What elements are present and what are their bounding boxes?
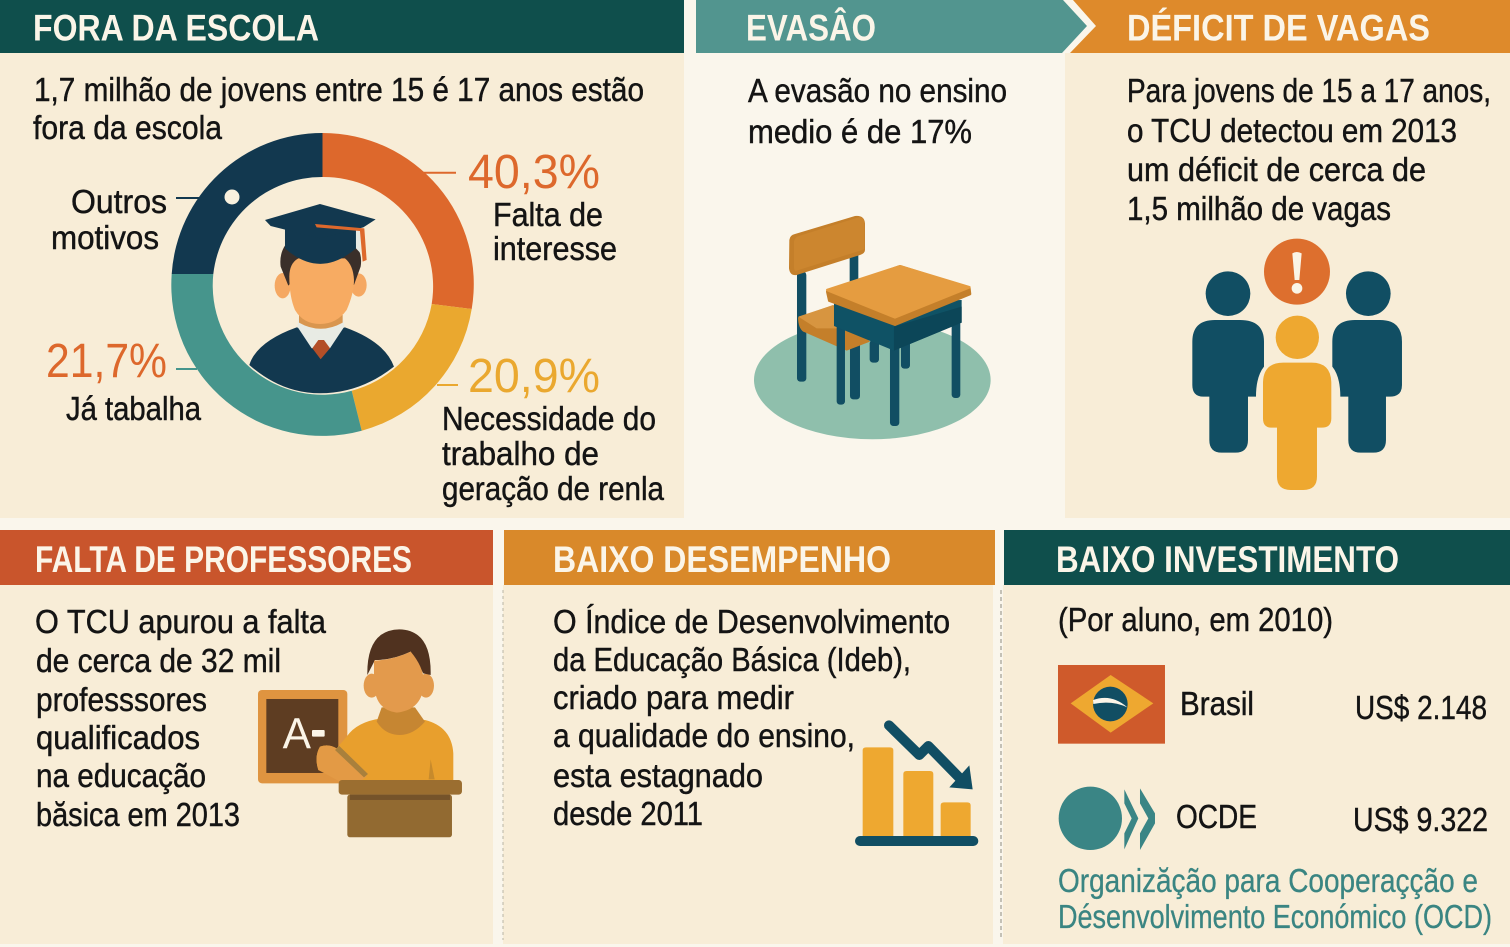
label: outros motivos: motivos — [51, 219, 159, 256]
row: ocde: OCDE — [1176, 798, 1257, 835]
heading: evasao arrow: EVASÂO — [746, 6, 876, 48]
row: brasil — [1058, 665, 1487, 744]
text: ideb: esta estagnado — [553, 757, 763, 794]
text: ocde definition — [1058, 862, 1492, 935]
label: 40,3% falta de interesse: Falta de — [493, 196, 603, 233]
text: ideb: O Índice de Desenvolvimento — [553, 603, 950, 640]
intro text — [33, 71, 644, 146]
icon: declining bar chart — [855, 725, 978, 846]
panel: evasao — [696, 0, 1087, 518]
icon: teacher at blackboard — [258, 629, 462, 837]
label: 21,7% ja tabalha: 21,7% — [46, 335, 167, 388]
icon: people with alert — [1192, 239, 1402, 490]
label: outros motivos — [51, 183, 200, 256]
heading: baixo desempenho: BAIXO DESEMPENHO — [553, 539, 891, 580]
label: 21,7% ja tabalha: Já tabalha — [66, 390, 202, 427]
text: falta de professores: O TCU apurou a falta — [35, 603, 327, 640]
heading: falta de professores: FALTA DE PROFESSORES — [35, 539, 412, 580]
panel: baixo desempenho — [503, 530, 995, 944]
icon: teacher at blackboard: A — [283, 711, 311, 759]
intro text: fora da escola — [33, 109, 223, 146]
text: evasao: A evasão no ensino — [748, 72, 1007, 109]
text: falta de professores — [35, 603, 327, 833]
label: 20,9% necessidade do trabalho: Necessidade do — [442, 400, 656, 437]
text: evasao — [748, 72, 1007, 150]
row: ocde: US$ 9.322 — [1353, 801, 1488, 838]
heading: deficit de vagas: DÉFICIT DE VAGAS — [1127, 8, 1430, 48]
text: deficit — [1127, 72, 1491, 227]
heading: fora da escola — [0, 0, 684, 53]
text: ideb: criado para medir — [553, 679, 794, 716]
text: ideb — [553, 603, 950, 832]
text: ideb: da Educação Básica (Ideb), — [553, 641, 911, 678]
text: evasao: medio é de 17% — [748, 113, 972, 150]
label: 20,9% necessidade do trabalho: 20,9% — [468, 350, 600, 403]
text: ideb: a qualidade do ensino, — [553, 717, 855, 754]
icon: school desk and chair — [754, 216, 991, 439]
text: deficit: 1,5 milhão de vagas — [1127, 190, 1391, 227]
text: falta de professores: de cerca de 32 mil — [36, 642, 281, 679]
text: ideb: desde 2011 — [553, 795, 703, 832]
heading: baixo investimento — [1004, 530, 1510, 585]
heading: baixo desempenho — [504, 530, 995, 585]
icon: ocde logo — [1059, 787, 1155, 850]
panel: falta de professores — [0, 530, 493, 944]
heading: baixo investimento: BAIXO INVESTIMENTO — [1056, 539, 1399, 580]
icon: brazil flag — [1058, 665, 1165, 744]
label: 40,3% falta de interesse: 40,3% — [468, 146, 600, 199]
text: falta de professores: na educação — [36, 757, 206, 794]
heading: deficit de vagas — [1070, 0, 1510, 53]
icon: graduate — [249, 204, 394, 393]
panel: fora da escola — [0, 0, 684, 518]
text: deficit: o TCU detectou em 2013 — [1127, 112, 1457, 149]
text: falta de professores: qualificados — [36, 719, 200, 756]
label: 20,9% necessidade do trabalho: trabalho de — [442, 435, 599, 472]
label: 20,9% necessidade do trabalho — [437, 350, 665, 507]
heading: falta de professores — [0, 530, 493, 585]
text: deficit: um déficit de cerca de — [1127, 151, 1426, 188]
label: 40,3% falta de interesse: interesse — [493, 230, 617, 267]
text: falta de professores: professsores — [36, 681, 207, 718]
row: brasil: US$ 2.148 — [1355, 689, 1487, 726]
heading: evasao arrow — [696, 0, 1087, 53]
heading: fora da escola: FORA DA ESCOLA — [33, 8, 319, 48]
panel: baixo investimento — [1001, 530, 1510, 944]
panel: deficit de vagas — [1065, 0, 1510, 518]
label: 20,9% necessidade do trabalho: geração de renla — [442, 470, 665, 507]
label: 21,7% ja tabalha — [46, 335, 202, 427]
row: brasil: Brasil — [1180, 685, 1254, 722]
text: falta de professores: băsica em 2013 — [36, 796, 240, 833]
text: por aluno: (Por aluno, em 2010) — [1058, 601, 1333, 638]
label: outros motivos: Outros — [71, 183, 167, 220]
intro text: 1,7 milhão de jovens entre 15 é 17 anos estão — [34, 71, 644, 108]
row: ocde — [1059, 787, 1488, 850]
label: 40,3% falta de interesse — [423, 146, 617, 267]
donut chart — [171, 133, 474, 436]
